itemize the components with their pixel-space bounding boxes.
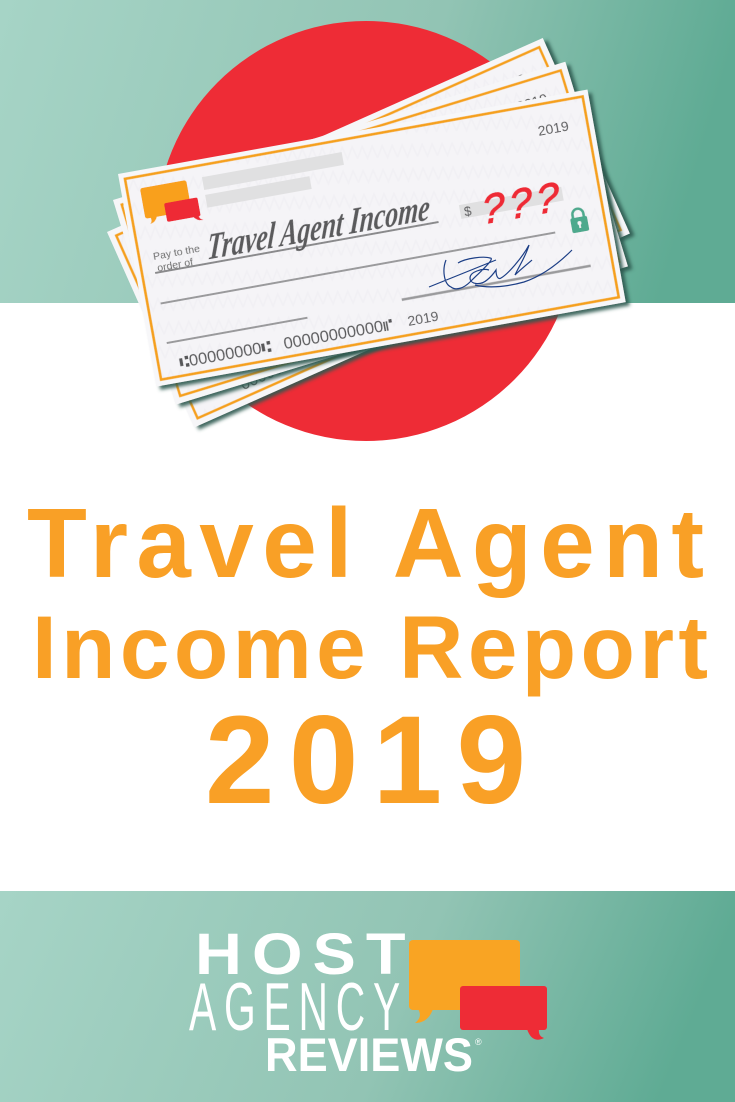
payee line <box>155 222 439 273</box>
back check 3: 00000000 00000000000 <box>238 308 403 394</box>
pay to the order of label: order of <box>156 256 194 274</box>
icon: orange speech bubble <box>409 940 520 1023</box>
memo line <box>167 318 307 343</box>
back check 2: 00000000 00000000000 <box>225 311 396 378</box>
logo word agency: AGENCY <box>189 968 400 1045</box>
payee script text: Travel Agent Income <box>206 187 431 269</box>
amount question marks: ??? <box>481 173 560 233</box>
check date: 2019 <box>536 118 570 139</box>
amount written line <box>161 232 555 304</box>
top green band <box>0 0 735 303</box>
icon: green padlock <box>569 207 589 233</box>
address placeholder bars <box>202 152 347 208</box>
pay to the order of label: Pay to the <box>152 243 201 263</box>
back check 3: 2019 <box>494 70 529 97</box>
registered mark: ® <box>475 1037 482 1047</box>
signature line <box>402 266 591 300</box>
back check 2: 2019 <box>515 90 550 114</box>
icon: check logo bubbles <box>140 178 203 230</box>
logo word reviews: REVIEWS <box>265 1028 473 1081</box>
main check <box>118 90 626 387</box>
check number: 2019 <box>406 308 440 329</box>
title line 2: Income Report <box>32 597 708 697</box>
back check 2 <box>113 62 628 405</box>
title line 1: Travel Agent <box>27 488 704 598</box>
routing numbers: ⑆00000000⑆ <box>178 338 273 372</box>
check paper <box>118 90 626 387</box>
icon: red speech bubble <box>460 986 547 1040</box>
back check 3 <box>107 38 630 427</box>
red circle <box>156 21 576 441</box>
title year: 2019 <box>205 691 526 830</box>
dollar sign: $ <box>463 203 473 219</box>
bottom green band <box>0 891 735 1102</box>
host agency reviews logo <box>189 922 547 1081</box>
signature <box>429 245 572 289</box>
logo word host: HOST <box>195 922 406 987</box>
orange check border <box>125 96 619 380</box>
amount bar <box>459 187 564 219</box>
account number: 00000000000⑈ <box>282 316 395 353</box>
